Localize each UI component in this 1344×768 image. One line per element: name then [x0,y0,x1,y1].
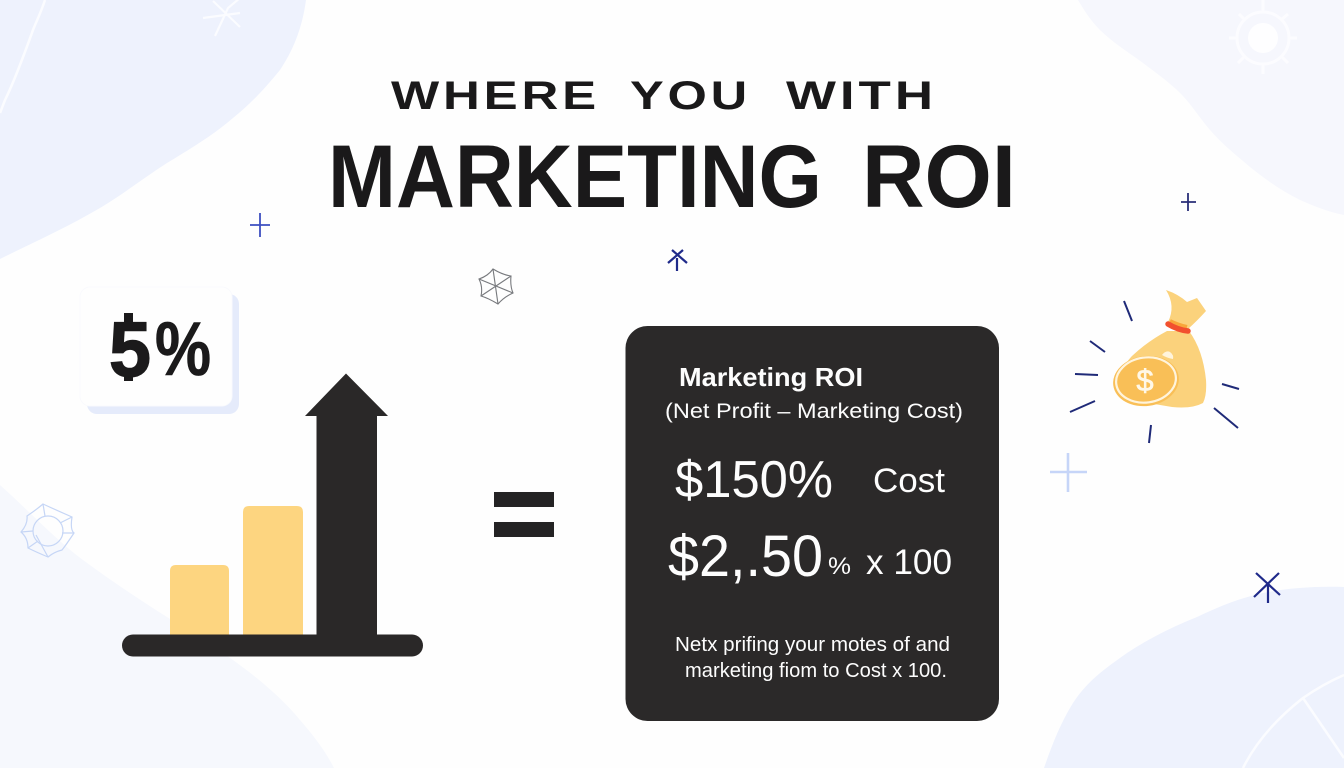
stat card: 5% [80,287,239,414]
panel heading: Marketing ROI [679,362,863,392]
title line 1: YOU [630,74,751,118]
formula percent sign: % [828,553,851,580]
equals sign [494,492,554,537]
stat value percent: % [155,307,211,392]
icon: navy star sparkle [668,250,687,271]
bag neck [1166,290,1206,329]
icon: navy plus sparkle [1181,193,1196,211]
coin knot [1162,351,1173,359]
bag tie band [1170,321,1187,327]
formula multiplier: x 100 [866,543,952,582]
bar chart with rising arrow [122,374,423,656]
icon: gray web [479,269,513,304]
dollar stem marks [124,313,133,381]
title [328,74,1016,226]
panel note line 1: Netx prifing your motes of and [675,633,950,656]
stat value five: 5 [109,305,151,393]
arrow: rising [305,374,388,635]
coin [1110,352,1182,410]
background shape: top-right blob [1078,0,1344,215]
title line 2: MARKETING [328,126,822,226]
formula value 2: $2,.50 [668,524,823,589]
formula label: cost: Cost [873,462,946,500]
title line 2: ROI [862,126,1016,226]
formula value 1: $150% [675,451,833,509]
title line 1: WITH [786,74,937,118]
icon: pale blue plus sparkle [1050,453,1087,492]
background shape: bottom-left blob [0,485,334,768]
panel: ROI formula [626,326,999,721]
title line 1 [391,74,937,118]
bag body [1120,331,1206,408]
bar: medium [243,506,303,635]
title line 1: WHERE [391,74,600,118]
bar: small [170,565,229,635]
chart baseline [122,634,423,656]
icon: navy star sparkle bottom right [1254,573,1280,603]
background shape: top-left blob [0,0,306,259]
icon: money bag [1070,290,1239,443]
formula subtitle: (Net Profit – Marketing Cost) [665,399,963,423]
icon: blue plus sparkle [250,213,270,237]
icon: pale blue web [21,504,74,557]
panel note line 2: marketing fiom to Cost x 100. [685,659,947,682]
bag tie [1168,324,1188,331]
background shape: bottom-right blob [1044,587,1344,768]
bag rays [1070,301,1239,443]
coin dollar sign: $ [1136,363,1154,398]
